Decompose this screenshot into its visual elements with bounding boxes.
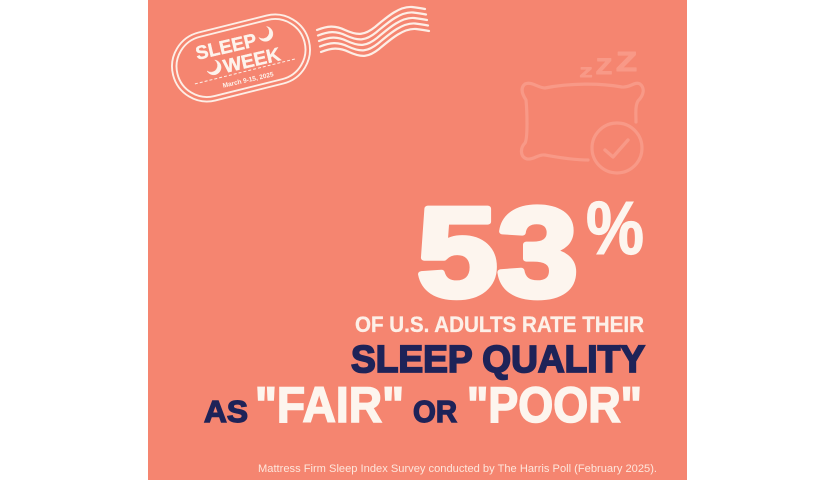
headline line 3 xyxy=(204,377,642,433)
word: POOR: "POOR" xyxy=(467,377,642,433)
stamp text: WEEK: WEEK xyxy=(221,44,283,78)
headline line 2: SLEEP QUALITY xyxy=(351,339,645,381)
icon: moon left xyxy=(205,59,223,76)
icon: postmark wavy lines xyxy=(317,7,429,56)
panel: coral background xyxy=(148,0,687,480)
icon: moon right xyxy=(257,25,274,43)
zzz: Z xyxy=(580,64,593,80)
word: AS: AS xyxy=(204,394,248,429)
zzz xyxy=(580,46,637,80)
word: OR: OR xyxy=(413,394,457,429)
pillow outline xyxy=(521,83,643,160)
stamp text: date: March 9-15, 2025 xyxy=(222,71,275,90)
check circle xyxy=(592,123,642,173)
big number: 53: 53 xyxy=(417,181,578,323)
source footnote: Mattress Firm Sleep Index Survey conducted by The Harris Poll (February 2025). xyxy=(258,463,657,475)
icon: Sleep Week stamp xyxy=(165,7,317,109)
check mark xyxy=(605,140,628,157)
icon: pillow with check mark and zzz xyxy=(521,46,643,173)
percent sign: % xyxy=(586,186,644,270)
zzz: Z xyxy=(616,46,637,77)
word: FAIR: "FAIR" xyxy=(255,377,404,433)
headline line 1: OF U.S. ADULTS RATE THEIR xyxy=(355,312,644,337)
zzz: Z xyxy=(596,54,612,79)
stamp text: SLEEP: SLEEP xyxy=(194,30,259,65)
